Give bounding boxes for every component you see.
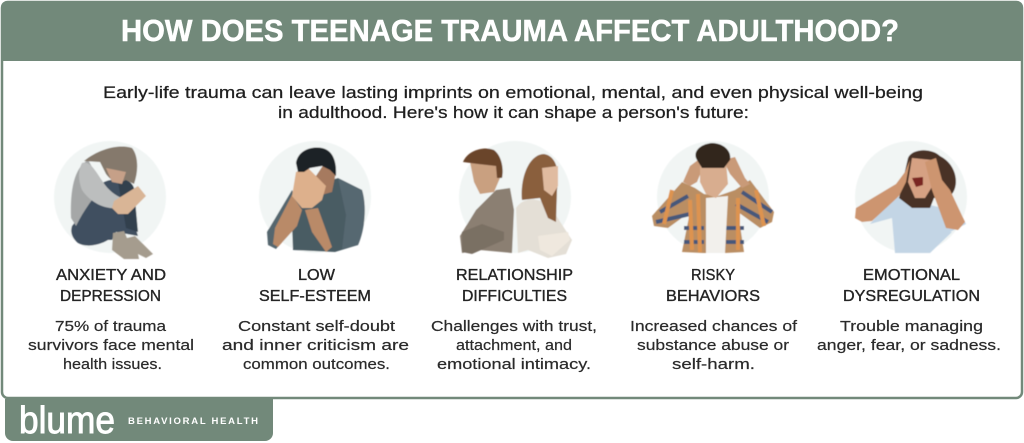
heading: SELF-ESTEEM: [259, 288, 371, 305]
intro text: in adulthood. Here's how it can shape a person's future:: [278, 103, 749, 122]
description: Challenges with trust,: [431, 318, 597, 335]
intro text: [103, 83, 923, 122]
description: [630, 318, 798, 373]
title banner: [1, 1, 1023, 61]
heading: RELATIONSHIP: [456, 267, 573, 284]
heading: RISKY: [691, 267, 735, 284]
description: Constant self-doubt: [238, 318, 396, 335]
heading: DYSREGULATION: [843, 288, 980, 305]
description: survivors face mental: [28, 337, 194, 354]
description: [817, 318, 1001, 354]
icon: stressed man in plaid shirt: [652, 141, 774, 253]
heading: LOW: [298, 267, 335, 284]
icon: woman screaming: [855, 141, 967, 253]
description: anger, fear, or sadness.: [817, 337, 1001, 354]
heading: ANXIETY AND: [56, 267, 166, 284]
description: emotional intimacy.: [437, 356, 591, 373]
description: [28, 318, 194, 373]
description: [222, 318, 409, 373]
icon: man covering face: [259, 141, 371, 253]
heading: [456, 267, 573, 305]
description: 75% of trauma: [55, 318, 167, 335]
description: attachment, and: [456, 337, 572, 354]
heading: [259, 267, 371, 305]
heading: DIFFICULTIES: [462, 288, 567, 305]
icon: couple back to back: [459, 141, 572, 258]
description: [431, 318, 597, 373]
heading: BEHAVIORS: [666, 288, 760, 305]
icon: woman hugging knees: [54, 141, 166, 259]
column: anxiety and depression: [28, 141, 194, 373]
title: HOW DOES TEENAGE TRAUMA AFFECT ADULTHOOD?: [121, 13, 899, 48]
column: relationship difficulties: [431, 141, 597, 373]
logo tagline: BEHAVIORAL HEALTH: [128, 416, 258, 427]
description: health issues.: [63, 356, 162, 373]
description: self-harm.: [672, 356, 755, 373]
description: and inner criticism are: [222, 337, 409, 354]
logo wordmark: blume: [19, 400, 115, 442]
intro text: Early-life trauma can leave lasting imprints on emotional, mental, and even physical well-being: [103, 83, 923, 102]
column: risky behaviors: [630, 141, 798, 373]
description: common outcomes.: [243, 356, 390, 373]
description: Increased chances of: [630, 318, 798, 335]
heading: EMOTIONAL: [863, 267, 960, 284]
column: low self-esteem: [222, 141, 409, 373]
heading: [843, 267, 980, 305]
heading: [56, 267, 166, 305]
description: substance abuse or: [637, 337, 789, 354]
logo tab: [5, 399, 273, 442]
description: Trouble managing: [840, 318, 983, 335]
heading: [666, 267, 760, 305]
column: emotional dysregulation: [817, 141, 1001, 354]
heading: DEPRESSION: [60, 288, 161, 305]
